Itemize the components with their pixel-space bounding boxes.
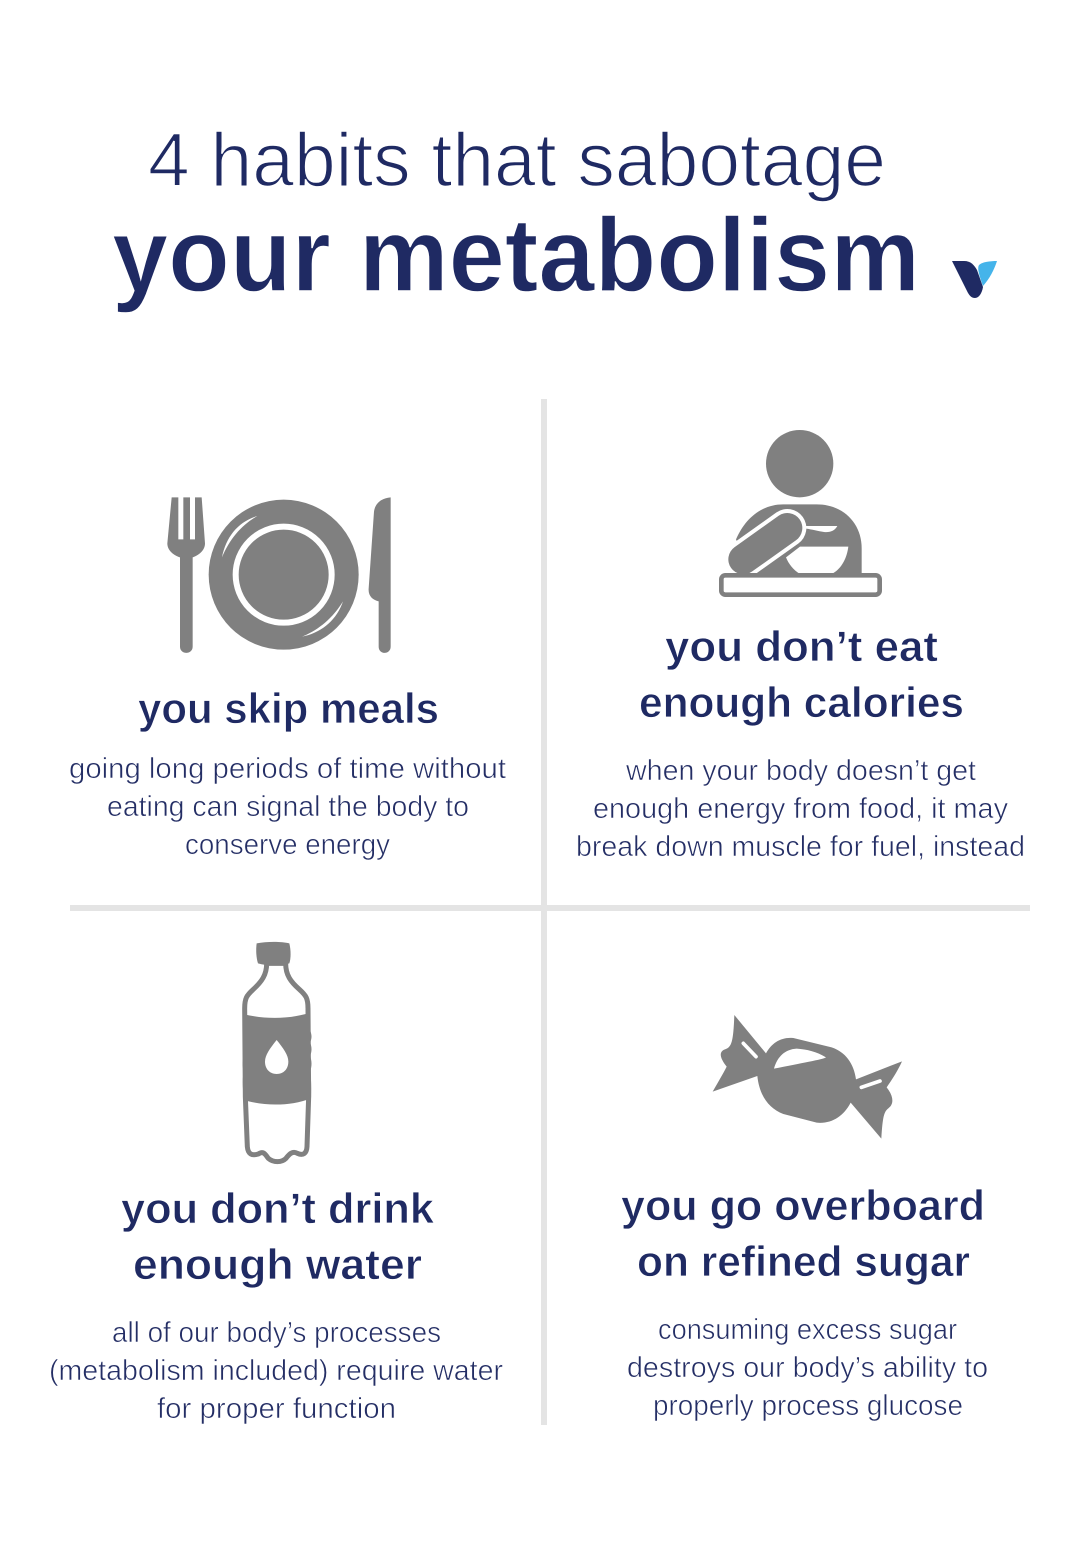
title: your metabolism — [112, 197, 920, 314]
heading: enough water — [133, 1241, 422, 1289]
text block: properly process glucose — [653, 1390, 963, 1422]
heading: you don’t drink — [121, 1185, 434, 1233]
text block: (metabolism included) require water — [49, 1355, 503, 1387]
heading — [621, 1182, 985, 1286]
heading — [121, 1185, 434, 1289]
text block: enough energy from food, it may — [593, 793, 1008, 825]
panel: you go overboard on refined sugar — [621, 1015, 988, 1422]
icon: person eating from a bowl — [721, 430, 880, 595]
heading: enough calories — [639, 679, 964, 727]
panel: you skip meals — [69, 497, 506, 861]
icon: water bottle — [242, 942, 311, 1162]
text block — [576, 755, 1025, 863]
panel: you don't eat enough calories — [576, 430, 1025, 863]
heading — [639, 623, 964, 727]
title — [112, 118, 920, 314]
text block: break down muscle for fuel, instead — [576, 831, 1025, 863]
heading: you don’t eat — [665, 623, 938, 671]
text block: destroys our body’s ability to — [627, 1352, 988, 1384]
heading: you skip meals — [138, 685, 439, 733]
text block: conserve energy — [185, 829, 390, 861]
text block: eating can signal the body to — [107, 791, 469, 823]
title: 4 habits that sabotage — [148, 118, 886, 203]
heading: you go overboard — [621, 1182, 985, 1230]
icon: wrapped candy — [713, 1015, 902, 1139]
icon: logo — [952, 261, 997, 298]
panel: you don't drink enough water — [49, 942, 503, 1425]
icon: plate with fork and knife — [167, 497, 391, 653]
text block: all of our body’s processes — [112, 1317, 441, 1349]
heading: on refined sugar — [637, 1238, 970, 1286]
text block: when your body doesn’t get — [625, 755, 976, 787]
text block — [69, 753, 506, 861]
text block: consuming excess sugar — [658, 1314, 957, 1346]
text block: going long periods of time without — [69, 753, 506, 785]
text block — [627, 1314, 988, 1422]
text block: for proper function — [157, 1393, 396, 1425]
text block — [49, 1317, 503, 1425]
